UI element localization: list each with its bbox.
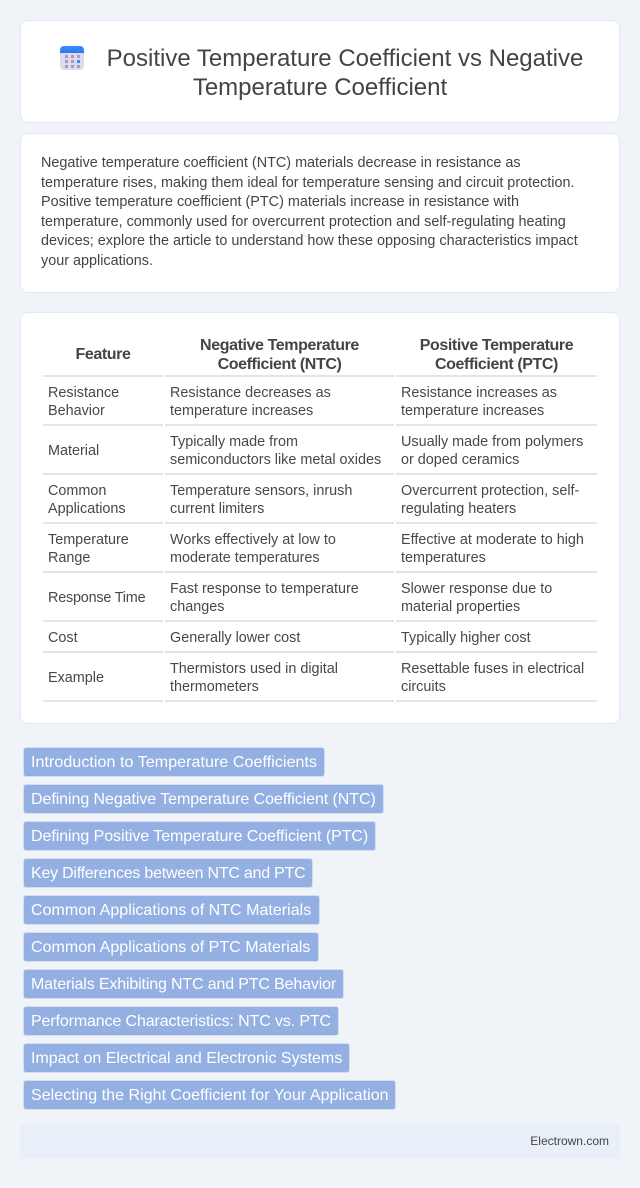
title: Positive Temperature Coefficient vs Negative [107, 45, 583, 72]
table: comparison: Thermistors used in digital [170, 661, 338, 677]
table: comparison: regulating heaters [401, 501, 516, 517]
footer [20, 1124, 620, 1158]
table: comparison: Overcurrent protection, self- [401, 483, 579, 499]
topic list: Selecting the Right Coefficient for Your Application [31, 1087, 389, 1104]
topic list: Defining Negative Temperature Coefficient (NTC) [31, 791, 376, 808]
table: comparison: Positive Temperature [420, 337, 573, 354]
table: comparison: Coefficient (NTC) [218, 356, 341, 372]
table: comparison: Resistance increases as [401, 385, 557, 401]
table: comparison: Temperature sensors, inrush [170, 483, 352, 499]
table: comparison: or doped ceramics [401, 452, 519, 468]
text block: introduction: your applications. [41, 253, 153, 269]
table: comparison [43, 337, 597, 702]
topic list: Defining Positive Temperature Coefficient (PTC) [31, 828, 368, 845]
table: comparison: semiconductors like metal oxides [170, 452, 381, 468]
table: comparison: Feature [76, 346, 130, 363]
title [107, 45, 583, 101]
table: comparison: Typically made from [170, 434, 298, 450]
table: comparison: current limiters [170, 501, 264, 517]
topic list: Common Applications of PTC Materials [31, 939, 310, 956]
table: comparison: Effective at moderate to high [401, 532, 584, 548]
table: comparison: moderate temperatures [170, 550, 320, 566]
text block: introduction: Positive temperature coefficient (PTC) materials increase in resistance with [41, 194, 519, 210]
table: comparison: thermometers [170, 679, 259, 695]
table: comparison: Fast response to temperature [170, 581, 359, 597]
table: comparison: Common [48, 483, 106, 499]
topic list: Materials Exhibiting NTC and PTC Behavior [31, 976, 336, 993]
text block: introduction: temperature, commonly used for overcurrent protection and self-regulating heating [41, 214, 566, 230]
table: comparison: Resettable fuses in electrical [401, 661, 584, 677]
panel: title card [20, 20, 620, 123]
table: comparison: Slower response due to [401, 581, 552, 597]
footer credit: Electrown.com [530, 1134, 609, 1148]
topic list: Common Applications of NTC Materials [31, 902, 311, 919]
topic list: Performance Characteristics: NTC vs. PTC [31, 1013, 331, 1030]
table: comparison: Example [48, 670, 104, 686]
table: comparison: Negative Temperature [200, 337, 359, 354]
text block: introduction: devices; explore the article to understand how these opposing characteristics impact [41, 233, 578, 249]
table: comparison: temperature increases [401, 403, 544, 419]
table: comparison: Works effectively at low to [170, 532, 336, 548]
topic list: Key Differences between NTC and PTC [31, 865, 305, 882]
table: comparison: Temperature [48, 532, 129, 548]
table: comparison: circuits [401, 679, 446, 695]
text block: introduction: temperature rises, making them ideal for temperature sensing and circuit protection. [41, 175, 575, 191]
table: comparison: Response Time [48, 590, 145, 606]
table: comparison: Resistance [48, 385, 119, 401]
table: comparison: Generally lower cost [170, 630, 300, 646]
table: comparison: Behavior [48, 403, 105, 419]
topic list: Introduction to Temperature Coefficients [31, 754, 317, 771]
table: comparison: Material [48, 443, 99, 459]
table: comparison: Range [48, 550, 90, 566]
table: comparison: Typically higher cost [401, 630, 531, 646]
text block: introduction [41, 155, 578, 269]
title: Temperature Coefficient [193, 74, 447, 101]
panel: comparison table [20, 312, 620, 724]
table: comparison: temperature increases [170, 403, 313, 419]
text block: introduction: Negative temperature coefficient (NTC) materials decrease in resistance as [41, 155, 521, 171]
table: comparison: Usually made from polymers [401, 434, 583, 450]
table: comparison: material properties [401, 599, 520, 615]
panel: introduction [20, 133, 620, 293]
icon: calendar [60, 46, 84, 70]
table: comparison: changes [170, 599, 224, 615]
table: comparison: Resistance decreases as [170, 385, 331, 401]
topic list [23, 747, 396, 1110]
table: comparison: Coefficient (PTC) [435, 356, 558, 372]
table: comparison: temperatures [401, 550, 486, 566]
table: comparison: Cost [48, 630, 78, 646]
table: comparison: Applications [48, 501, 126, 517]
topic list: Impact on Electrical and Electronic Systems [31, 1050, 342, 1067]
